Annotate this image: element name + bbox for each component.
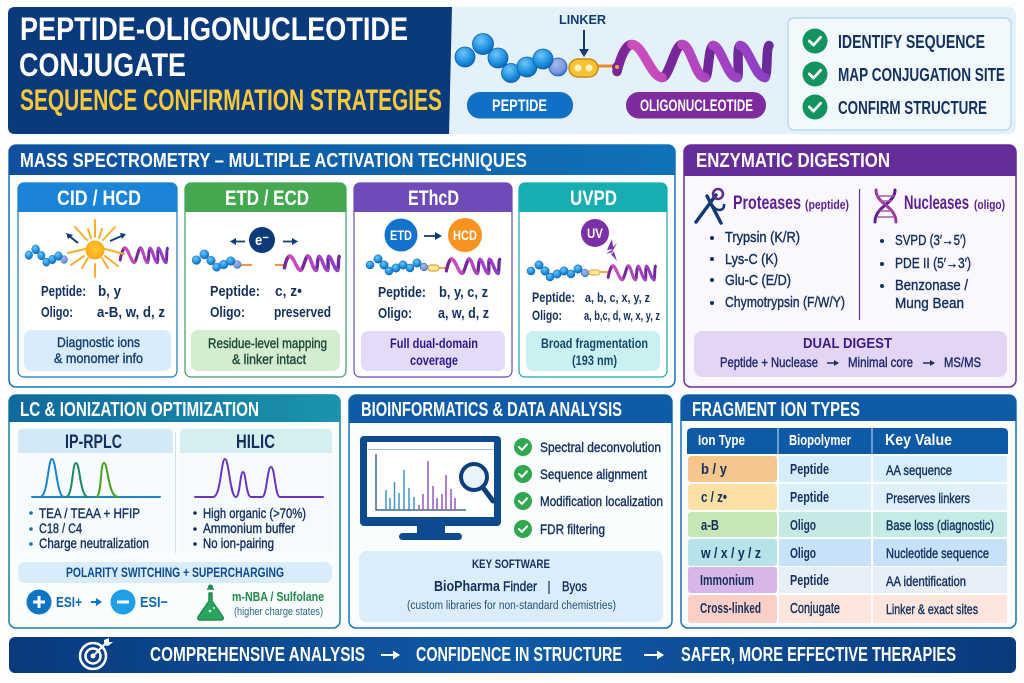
row: cross-linked: Cross-linked bbox=[700, 601, 761, 617]
row: b / y: AA sequence bbox=[886, 462, 952, 478]
card: ETD / ECD: Peptide: bbox=[210, 283, 260, 300]
nucleases column: (oligo) bbox=[974, 197, 1005, 212]
heading: ENZYMATIC DIGESTION bbox=[696, 150, 890, 172]
card: UVPD: a, b,c, d, w, x, y, z bbox=[584, 309, 660, 323]
row: cross-linked: Conjugate bbox=[790, 601, 840, 617]
header band bbox=[8, 7, 1016, 134]
footer banner: COMPREHENSIVE ANALYSIS bbox=[150, 644, 365, 666]
key software box: (custom libraries for non-standard chemistries) bbox=[407, 600, 616, 612]
polarity bar bbox=[18, 562, 332, 583]
supercharging reagents bbox=[232, 589, 324, 618]
icon: ETD then HCD bbox=[366, 218, 500, 275]
key software box: Finder bbox=[503, 578, 537, 594]
proteases column: Trypsin (K/R) bbox=[725, 230, 800, 246]
goals checklist: IDENTIFY SEQUENCE bbox=[838, 32, 985, 52]
proteases column: Glu-C (E/D) bbox=[725, 273, 791, 289]
key software box: BioPharma bbox=[434, 578, 501, 595]
table header: Key Value bbox=[885, 432, 952, 449]
card: UVPD: Oligo: bbox=[532, 307, 562, 323]
card: ETD / ECD: Oligo: bbox=[210, 304, 245, 321]
proteases column: Proteases bbox=[733, 193, 801, 214]
key software box: Byos bbox=[562, 578, 587, 594]
card: ETD / ECD bbox=[185, 183, 346, 377]
callout: dual digest: MS/MS bbox=[944, 354, 981, 370]
row: a-B: a-B bbox=[701, 518, 719, 534]
row: immonium: AA identification bbox=[886, 573, 966, 589]
row: immonium: Immonium bbox=[700, 573, 754, 589]
icon: flask bbox=[198, 584, 223, 620]
HILIC column: High organic (>70%) bbox=[203, 505, 306, 521]
card: UVPD bbox=[519, 183, 667, 377]
proteases column bbox=[710, 193, 849, 311]
panel: mass spectrometry bbox=[9, 145, 675, 387]
note: & monomer info bbox=[54, 350, 143, 366]
row: b / y bbox=[688, 456, 1007, 482]
IP-RPLC column: C18 / C4 bbox=[39, 520, 82, 536]
molecule illustration: peptide, linker, oligonucleotide: LINKER bbox=[559, 12, 607, 27]
card: CID / HCD: a-B, w, d, z bbox=[97, 304, 165, 321]
table header: Ion Type bbox=[698, 432, 745, 449]
key software box: KEY SOFTWARE bbox=[472, 559, 550, 571]
panel: bioinformatics bbox=[349, 395, 672, 628]
card: EThcD: b, y, c, z bbox=[439, 284, 488, 301]
molecule illustration: peptide, linker, oligonucleotide bbox=[455, 12, 769, 118]
card: EThcD: a, w, d, z bbox=[438, 305, 489, 322]
heading: MASS SPECTROMETRY – MULTIPLE ACTIVATION TECHNIQUES bbox=[20, 150, 527, 172]
IP-RPLC column: TEA / TEAA + HFIP bbox=[39, 505, 140, 521]
HILIC column: HILIC bbox=[236, 432, 275, 453]
feature checklist bbox=[514, 438, 663, 538]
supercharging reagents: m-NBA / Sulfolane bbox=[232, 589, 324, 604]
card: EThcD bbox=[354, 183, 512, 377]
row: cross-linked bbox=[688, 595, 1007, 623]
IP-RPLC column bbox=[18, 429, 173, 553]
polarity icons bbox=[26, 590, 168, 614]
row: w / x / y / z: Nucleotide sequence bbox=[886, 545, 989, 561]
icon: ETD then HCD: ETD bbox=[390, 227, 412, 243]
card: CID / HCD: Oligo: bbox=[41, 304, 73, 321]
nucleases column: Nucleases bbox=[904, 193, 969, 214]
HILIC column: Ammonium buffer bbox=[203, 520, 295, 536]
callout: dual digest bbox=[694, 331, 1007, 377]
footer banner bbox=[9, 637, 1016, 673]
card: UVPD: Peptide: bbox=[532, 289, 575, 305]
polarity icons: ESI+ bbox=[56, 594, 82, 611]
feature checklist: Spectral deconvolution bbox=[540, 439, 661, 455]
goals checklist bbox=[788, 18, 1011, 130]
card: UVPD: UVPD bbox=[570, 187, 617, 210]
icon: collision fragmentation bbox=[25, 220, 167, 277]
row: cross-linked: Linker & exact sites bbox=[886, 601, 978, 617]
nucleases column: Benzonase / bbox=[895, 278, 969, 294]
title panel: SEQUENCE CONFIRMATION STRATEGIES bbox=[20, 84, 442, 117]
card: EThcD: Peptide: bbox=[378, 284, 426, 301]
icon: monitor with spectrum bbox=[360, 436, 501, 540]
nucleases column: PDE II (5′→3′) bbox=[895, 256, 971, 272]
panel: LC and ionization bbox=[9, 395, 340, 628]
card: UVPD: a, b, c, x, y, z bbox=[585, 290, 650, 305]
note: Diagnostic ions bbox=[57, 334, 140, 350]
table header: Biopolymer bbox=[789, 432, 851, 449]
card: CID / HCD: Peptide: bbox=[41, 283, 86, 300]
icon: electron transfer bbox=[192, 227, 339, 271]
note: Full dual-domain bbox=[390, 335, 478, 351]
heading: FRAGMENT ION TYPES bbox=[692, 399, 860, 421]
row: c / z: Preserves linkers bbox=[886, 490, 970, 506]
row: b / y: Peptide bbox=[790, 462, 829, 478]
nucleases column: SVPD (3′→5′) bbox=[895, 233, 966, 249]
heading: BIOINFORMATICS & DATA ANALYSIS bbox=[361, 399, 622, 421]
icon: UV photon bbox=[527, 219, 655, 281]
card: EThcD: EThcD bbox=[408, 187, 459, 210]
row: c / z: c / z• bbox=[701, 490, 727, 506]
callout: dual digest: Peptide + Nuclease bbox=[720, 354, 818, 370]
row: c / z: Peptide bbox=[790, 490, 829, 506]
row: immonium bbox=[688, 567, 1007, 593]
title panel: CONJUGATE bbox=[19, 47, 186, 83]
row: w / x / y / z: Oligo bbox=[790, 546, 816, 562]
card: CID / HCD: CID / HCD bbox=[57, 187, 141, 210]
polarity icons: ESI− bbox=[140, 594, 168, 611]
panel: fragment ion types bbox=[681, 395, 1016, 628]
table header bbox=[687, 428, 1008, 454]
title panel: PEPTIDE-OLIGONUCLEOTIDE bbox=[20, 11, 408, 47]
polarity bar: POLARITY SWITCHING + SUPERCHARGING bbox=[66, 565, 284, 580]
icon: ETD then HCD: HCD bbox=[453, 227, 477, 243]
key software box bbox=[359, 551, 663, 622]
footer banner: CONFIDENCE IN STRUCTURE bbox=[416, 644, 622, 666]
icon: electron transfer: e⁻ bbox=[255, 232, 269, 249]
proteases column: Lys-C (K) bbox=[725, 252, 778, 268]
HILIC column bbox=[180, 429, 332, 553]
note bbox=[526, 331, 660, 371]
nucleases column: Mung Bean bbox=[895, 296, 964, 312]
supercharging reagents: (higher charge states) bbox=[234, 606, 323, 618]
note: Broad fragmentation bbox=[541, 335, 648, 351]
table bbox=[687, 428, 1008, 623]
feature checklist: Sequence alignment bbox=[540, 466, 647, 482]
callout: dual digest: Minimal core bbox=[848, 354, 913, 370]
note: & linker intact bbox=[232, 351, 306, 367]
card: ETD / ECD: preserved bbox=[274, 304, 331, 321]
row: a-B: Oligo bbox=[790, 518, 816, 534]
note bbox=[361, 331, 505, 371]
IP-RPLC column: Charge neutralization bbox=[39, 535, 149, 551]
nucleases column bbox=[880, 193, 1005, 312]
icon: DNA bbox=[875, 190, 896, 222]
row: a-B: Base loss (diagnostic) bbox=[886, 517, 994, 533]
note bbox=[191, 330, 340, 371]
card: CID / HCD bbox=[18, 183, 177, 377]
row: a-B bbox=[688, 512, 1007, 537]
card: CID / HCD: b, y bbox=[98, 283, 122, 300]
note bbox=[24, 330, 171, 371]
chromatogram bbox=[32, 459, 160, 497]
icon: target bbox=[80, 638, 113, 669]
feature checklist: FDR filtering bbox=[540, 521, 605, 537]
row: immonium: Peptide bbox=[790, 573, 829, 589]
peptide pill: PEPTIDE bbox=[492, 97, 547, 115]
icon: UV photon: UV bbox=[587, 226, 603, 241]
note: coverage bbox=[410, 352, 458, 368]
note: Residue-level mapping bbox=[208, 335, 327, 351]
panel: enzymatic digestion bbox=[684, 145, 1016, 387]
icon: scissors bbox=[696, 189, 724, 223]
IP-RPLC column: IP-RPLC bbox=[65, 432, 122, 453]
peptide pill bbox=[467, 92, 573, 118]
row: w / x / y / z: w / x / y / z bbox=[700, 546, 761, 562]
heading: LC & IONIZATION OPTIMIZATION bbox=[20, 399, 259, 421]
card: ETD / ECD: ETD / ECD bbox=[225, 187, 309, 210]
card: ETD / ECD: c, z• bbox=[275, 283, 302, 300]
proteases column: Chymotrypsin (F/W/Y) bbox=[725, 295, 845, 311]
row: w / x / y / z bbox=[688, 539, 1007, 566]
callout: dual digest: DUAL DIGEST bbox=[803, 335, 892, 352]
HILIC column: No ion-pairing bbox=[203, 535, 274, 551]
oligonucleotide pill bbox=[626, 92, 766, 118]
title panel bbox=[8, 7, 452, 134]
oligonucleotide pill: OLIGONUCLEOTIDE bbox=[640, 97, 753, 115]
chromatogram bbox=[195, 459, 323, 497]
note: (193 nm) bbox=[572, 352, 617, 368]
card: EThcD: Oligo: bbox=[378, 305, 412, 322]
feature checklist: Modification localization bbox=[540, 493, 663, 509]
row: c / z bbox=[688, 484, 1007, 510]
proteases column: (peptide) bbox=[805, 197, 849, 212]
row: b / y: b / y bbox=[701, 462, 727, 478]
